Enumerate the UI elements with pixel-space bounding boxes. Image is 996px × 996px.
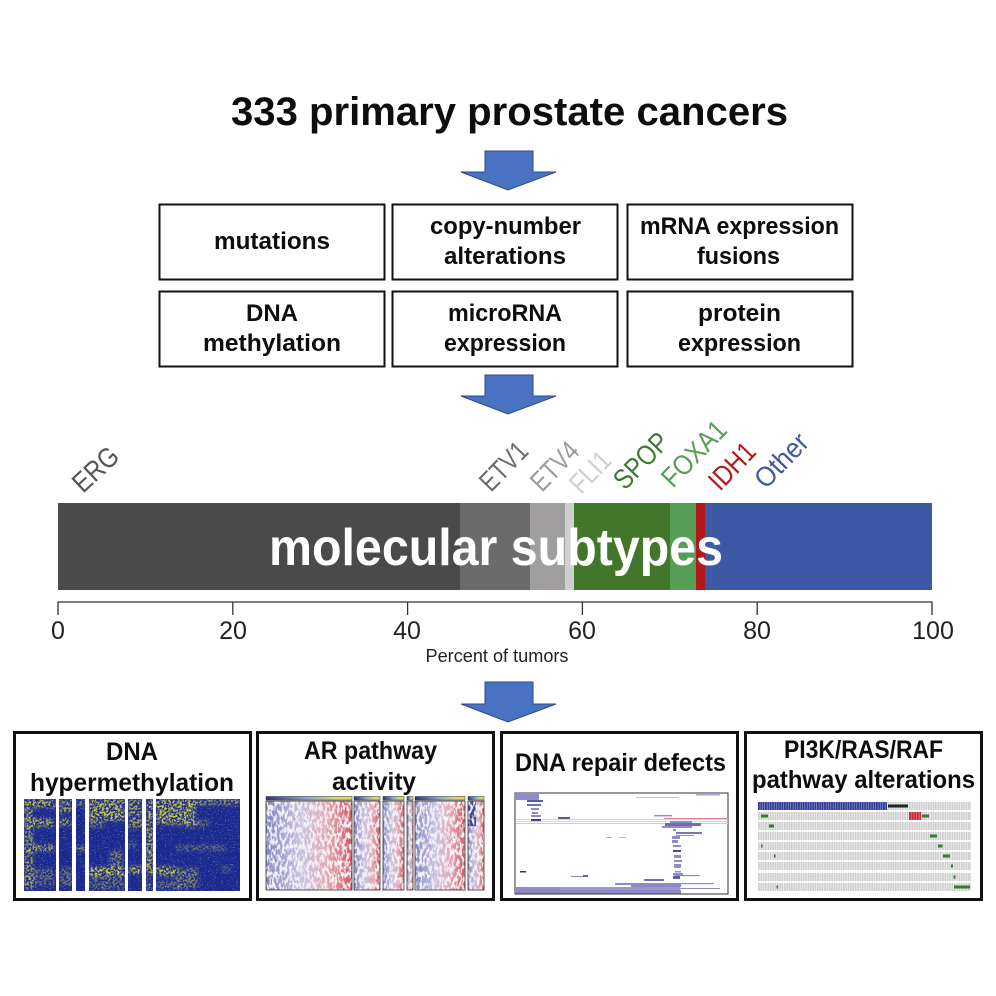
stacked bar: molecular subtypes bbox=[58, 503, 932, 590]
panel heading: PI3K/RAS/RAF bbox=[784, 736, 943, 764]
axis: percent of tumors: 0 bbox=[51, 617, 65, 645]
panel heading: AR pathway bbox=[304, 737, 437, 765]
alteration matrix bbox=[515, 793, 728, 894]
box: mRNA expression fusions: fusions bbox=[697, 243, 780, 270]
panel: data platforms bbox=[160, 204, 852, 366]
box: mutations bbox=[160, 204, 384, 280]
subtype labels bbox=[66, 414, 815, 499]
box: copy-number alterations bbox=[392, 204, 618, 280]
score bars bbox=[266, 796, 484, 800]
label: ETV1: ETV1 bbox=[473, 435, 534, 497]
axis: percent of tumors: 60 bbox=[568, 617, 596, 645]
box: mRNA expression fusions: mRNA expression bbox=[640, 213, 839, 240]
panel: DNA hypermethylation bbox=[14, 732, 250, 900]
panel: AR pathway activity bbox=[258, 732, 494, 900]
heatmap: AR activity bbox=[262, 801, 486, 890]
arrow: cohort to assays bbox=[461, 151, 556, 190]
arrow: assays to subtypes bbox=[461, 375, 556, 414]
box: copy-number alterations: copy-number bbox=[430, 213, 581, 240]
axis: percent of tumors: 20 bbox=[219, 617, 247, 645]
box: mRNA expression fusions bbox=[628, 204, 852, 280]
heatmap: methylation bbox=[24, 799, 240, 891]
title: 333 primary prostate cancers bbox=[231, 90, 788, 134]
label: ETV4: ETV4 bbox=[524, 435, 585, 497]
panel heading bbox=[752, 736, 975, 794]
arrow: subtypes to findings bbox=[461, 682, 556, 722]
panel: DNA repair defects bbox=[502, 732, 738, 900]
axis: percent of tumors: 100 bbox=[912, 617, 954, 645]
label: FLI1: FLI1 bbox=[563, 445, 617, 499]
box: copy-number alterations: alterations bbox=[444, 243, 566, 270]
label: IDH1: IDH1 bbox=[702, 436, 762, 496]
axis: percent of tumors: 80 bbox=[743, 617, 771, 645]
box: microRNA expression bbox=[392, 292, 618, 366]
panel: PI3K/RAS/RAF pathway alterations bbox=[746, 732, 982, 900]
box: microRNA expression: microRNA bbox=[448, 300, 562, 327]
label: Other: Other bbox=[748, 427, 815, 494]
panel heading: activity bbox=[332, 768, 416, 796]
box: DNA methylation: methylation bbox=[203, 330, 341, 357]
panel heading: hypermethylation bbox=[30, 769, 234, 797]
box: protein expression bbox=[628, 292, 852, 366]
label: SPOP: SPOP bbox=[607, 426, 675, 495]
axis: percent of tumors: 40 bbox=[393, 617, 421, 645]
panel heading: DNA bbox=[106, 738, 158, 766]
box: protein expression: expression bbox=[678, 330, 801, 357]
axis: percent of tumors bbox=[51, 602, 954, 666]
box: mutations: mutations bbox=[214, 228, 330, 255]
label: FOXA1: FOXA1 bbox=[655, 414, 733, 493]
box: DNA methylation: DNA bbox=[246, 300, 298, 327]
box: DNA methylation bbox=[160, 292, 384, 366]
panel heading: DNA repair defects bbox=[515, 749, 726, 777]
label: ERG: ERG bbox=[66, 440, 125, 498]
axis title: Percent of tumors bbox=[426, 646, 568, 666]
bar heading: molecular subtypes bbox=[269, 519, 723, 577]
oncoprint bbox=[758, 802, 971, 891]
panel heading bbox=[304, 737, 437, 796]
panel heading bbox=[30, 738, 234, 797]
panel heading: pathway alterations bbox=[752, 766, 975, 794]
box: microRNA expression: expression bbox=[444, 330, 566, 357]
box: protein expression: protein bbox=[698, 300, 781, 327]
